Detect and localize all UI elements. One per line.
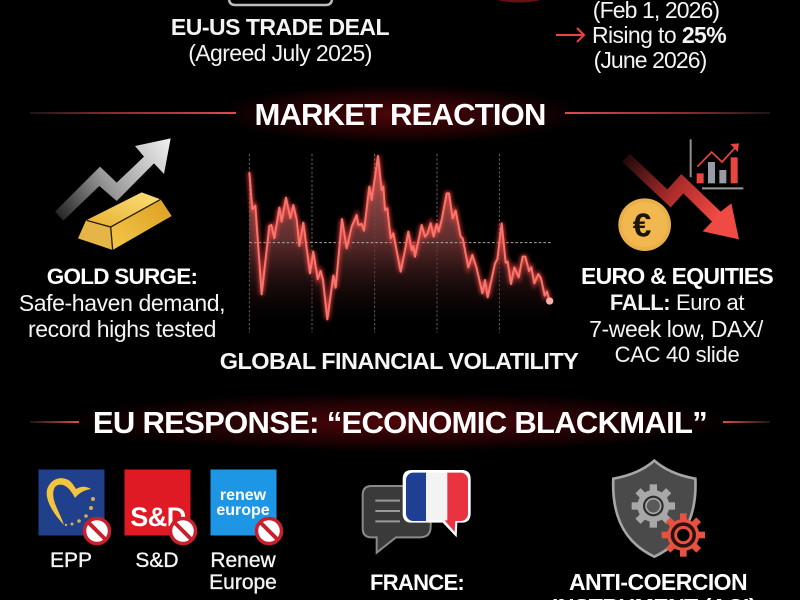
arrow: rising [556,27,586,43]
tariff rise to 25 percent: Rising to 25% [592,22,726,48]
tariff rise date: (June 2026) [594,47,706,73]
heading line: EURO & EQUITIES [581,263,773,289]
icon: Renew Europe logo blocked: europe [216,502,270,519]
gold surge description: record highs tested [28,316,216,342]
trade deal date: (Agreed July 2025) [188,40,372,66]
icon: S&D logo blocked: S&D [130,502,186,532]
panel: euro and equities fall [581,139,773,367]
section heading: EU response: EU RESPONSE: “ECONOMIC BLACKMAIL” [93,405,707,440]
week low line: 7-week low, DAX/ [589,316,763,342]
text: EU-US trade deal [171,14,389,66]
gold surge heading: GOLD SURGE: [47,264,197,289]
anti-coercion line: ANTI-COERCION [569,569,747,595]
trade deal heading: EU-US TRADE DEAL [171,14,389,40]
section heading: market reaction: MARKET REACTION [254,97,546,132]
gold surge description: Safe-haven demand, [19,290,225,316]
euro and equities description [581,263,773,367]
icon: shield with gears [612,458,705,558]
top fragment: trade deal icon base [228,0,334,6]
label: Renew Europe: Europe [209,571,277,594]
section heading: market reaction [30,87,770,142]
icon: falling arrow, euro coin and bar chart: € [633,208,651,245]
label: EPP: EPP [50,549,92,572]
text: tariff timeline [556,0,726,73]
top fragment: tariff icon base [497,0,541,2]
label: S&D: S&D [135,549,179,572]
icon: gold bar and rising arrow [55,138,172,250]
icon: S&D logo blocked [124,470,198,546]
label: Renew Europe: Renew [210,549,276,572]
icon: falling arrow, euro coin and bar chart [618,139,744,251]
gold surge description [19,290,225,342]
chart caption: GLOBAL FINANCIAL VOLATILITY [220,348,578,374]
icon: Renew Europe logo blocked [210,470,284,546]
fall line: FALL: Euro at [610,290,744,315]
label: France: FRANCE: [370,570,464,595]
label: Renew Europe [209,549,277,594]
icon: France speech bubbles [362,470,471,555]
icon: Renew Europe logo blocked: renew [220,487,267,504]
section heading: EU response [30,395,770,450]
panel: gold surge [19,138,225,342]
icon: EPP logo blocked [38,470,112,546]
text: anti-coercion instrument [552,569,756,600]
CAC line: CAC 40 slide [615,342,739,367]
chart: global financial volatility [244,152,554,333]
